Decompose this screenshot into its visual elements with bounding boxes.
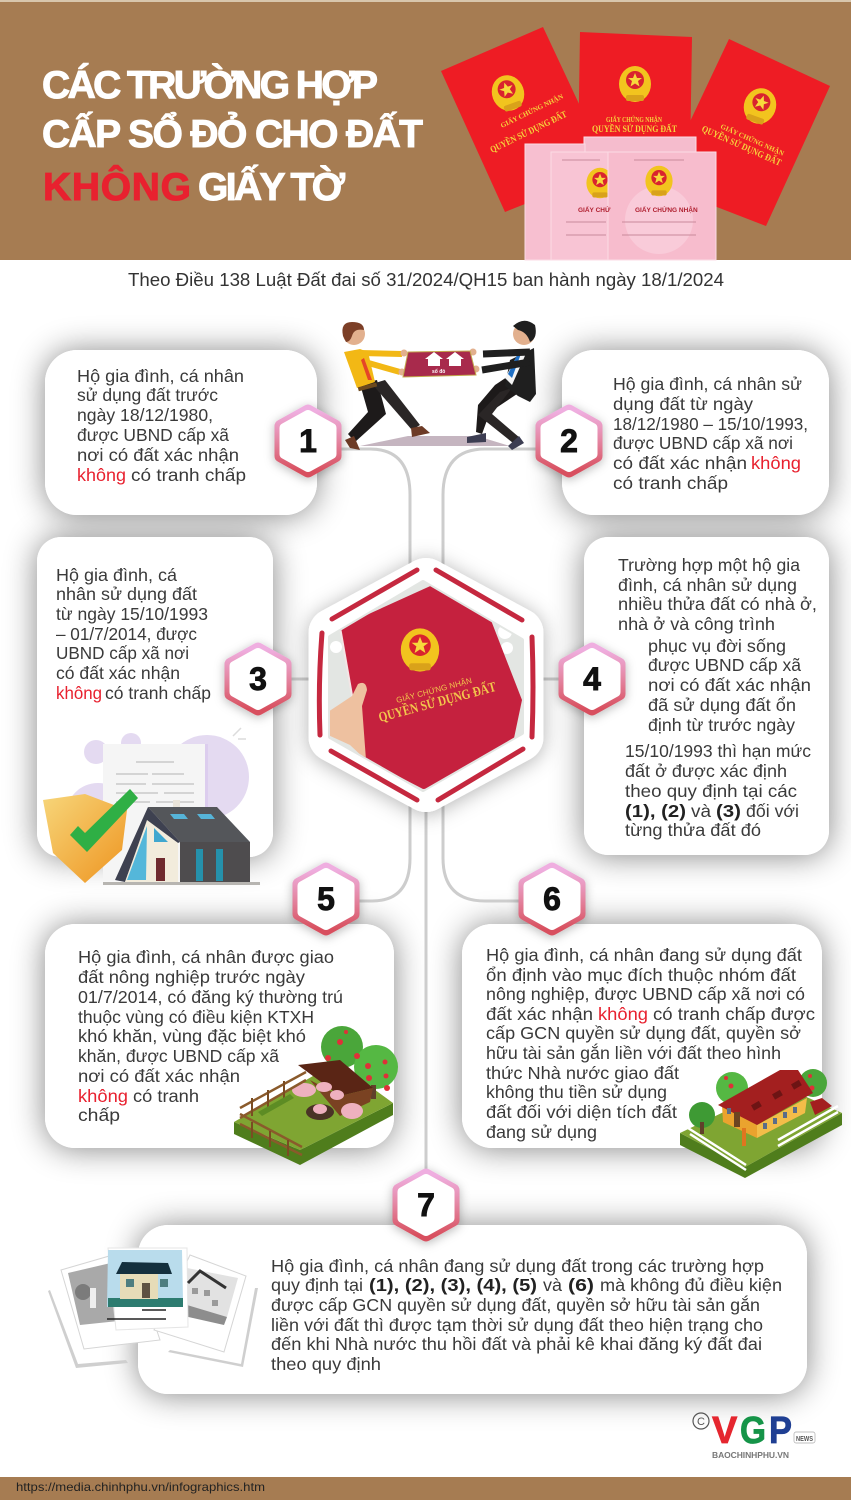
illustration: red land certificate books: QUYỀN SỬ DỤNG ĐẤT: [488, 107, 569, 156]
case 4 text: 15/10/1993 thì hạn mức: [625, 741, 811, 761]
title: KHÔNG: [43, 164, 191, 209]
case 4 text: đối với: [746, 801, 799, 821]
case 5 text: nơi có đất xác nhận: [78, 1066, 240, 1086]
illustration: farmhouse: [680, 1069, 842, 1178]
case 2 text: [613, 374, 808, 493]
logo: VGP: [693, 1410, 815, 1460]
illustration: red land certificate books: QUYỀN SỬ DỤNG ĐẤT: [592, 122, 678, 135]
badge 6: 6: [543, 881, 561, 917]
case 7 text: đến khi Nhà nước thu hồi đất và phải kê khai đăng ký đất đai: [271, 1334, 762, 1354]
illustration: two men pulling land certificate: sổ đỏ: [432, 368, 445, 375]
case 7 text: (1), (2), (3), (4), (5): [369, 1275, 537, 1295]
case 2 text: được UBND cấp xã nơi: [613, 433, 793, 453]
case 6 text: đất đối với diện tích đất: [486, 1102, 677, 1122]
case 1 text: nơi có đất xác nhận: [77, 445, 239, 465]
case 3 text: Hộ gia đình, cá: [56, 565, 177, 585]
title: GIẤY TỜ: [198, 165, 346, 209]
badge 1: [281, 411, 335, 471]
case 6 text: đang sử dụng: [486, 1122, 597, 1142]
case 5 text: khăn, được UBND cấp xã: [78, 1046, 279, 1066]
case 4 text: Trường hợp một hộ gia: [618, 555, 800, 575]
case 7 text: [271, 1256, 782, 1374]
case 1 text: Hộ gia đình, cá nhân: [77, 366, 244, 386]
central hexagon with certificate photo: QUYỀN SỬ DỤNG ĐẤT: [377, 678, 498, 726]
illustration: red land certificate books: QUYỀN SỬ DỤNG ĐẤT: [700, 122, 784, 169]
footer band: [0, 1477, 851, 1500]
case 4 text: (3): [716, 801, 741, 821]
illustration: red land certificate books: [441, 27, 830, 260]
case 6 text: thức Nhà nước giao đất: [486, 1063, 679, 1083]
case 6 text: có tranh chấp được: [653, 1004, 815, 1024]
case 4 text: đã sử dụng đất ổn: [648, 695, 796, 715]
case 4 text: đình, cá nhân sử dụng: [618, 575, 797, 595]
logo: VGP: BAOCHINHPHU.VN: [712, 1450, 789, 1460]
case 1 text: có tranh chấp: [131, 465, 246, 485]
case 3 text: nhân sử dụng đất: [56, 584, 197, 604]
case 6 text: không: [598, 1004, 648, 1024]
case 7 text: (6): [568, 1275, 594, 1295]
case 3 text: từ ngày 15/10/1993: [56, 604, 208, 624]
case 6 text: hữu tài sản gắn liền với đất theo hình: [486, 1042, 781, 1063]
case 5 text: đất nông nghiệp trước ngày: [78, 967, 305, 987]
case 5 text: có tranh: [133, 1086, 199, 1106]
badge 3: 3: [249, 661, 267, 697]
panel: case 7: [138, 1225, 807, 1394]
illustration: red land certificate books: GIẤY CHỨNG NHẬN: [635, 204, 698, 214]
case 2 text: dụng đất từ ngày: [613, 394, 753, 414]
illustration: red land certificate books: GIẤY CHỨ: [578, 204, 611, 214]
case 1 text: [77, 366, 246, 485]
case 2 text: có đất xác nhận: [613, 453, 747, 473]
case 4 text: và: [691, 801, 711, 821]
case 2 text: có tranh chấp: [613, 473, 728, 493]
case 6 text: nông nghiệp, được UBND cấp xã nơi có: [486, 984, 805, 1004]
badge 3: [231, 649, 285, 709]
case 4 text: theo quy định tại các: [625, 781, 797, 801]
title: [42, 63, 423, 209]
connector lines: [280, 449, 570, 1180]
logo: VGP: V: [712, 1410, 738, 1452]
case 6 text: đất xác nhận: [486, 1004, 593, 1024]
case 3 text: – 01/7/2014, được: [56, 624, 197, 644]
illustration: two men pulling land certificate: [342, 321, 536, 450]
case 3 text: UBND cấp xã nơi: [56, 643, 189, 663]
case 1 text: không: [77, 465, 126, 485]
badge 6: [525, 869, 579, 929]
logo: VGP: G: [740, 1410, 766, 1452]
case 7 text: quy định tại: [271, 1275, 363, 1295]
case 4 text: nơi có đất xác nhận: [648, 675, 811, 695]
case 2 text: Hộ gia đình, cá nhân sử: [613, 374, 802, 394]
badge 7: [399, 1175, 453, 1235]
subtitle: Theo Điều 138 Luật Đất đai số 31/2024/QH15 ban hành ngày 18/1/2024: [128, 270, 724, 290]
central hexagon with certificate photo: GIẤY CHỨNG NHẬN: [395, 675, 473, 705]
illustration: house photos: [48, 1248, 258, 1368]
central hexagon with certificate photo: [319, 570, 533, 800]
panel: case 1: [45, 350, 317, 515]
case 5 text: không: [78, 1086, 128, 1106]
badge 4: [565, 649, 619, 709]
case 1 text: sử dụng đất trước: [77, 385, 218, 405]
logo: VGP: NEWS: [796, 1436, 813, 1443]
illustration: red land certificate books: GIẤY CHỨNG NHẬN: [499, 92, 565, 130]
badge 5: [299, 869, 353, 929]
panel: case 2: [562, 350, 829, 515]
panel: case 5: [45, 924, 394, 1148]
case 7 text: mà không đủ điều kiện: [600, 1275, 782, 1295]
footer band: https://media.chinhphu.vn/infographics.htm: [16, 1480, 265, 1494]
badge 1: 1: [299, 423, 317, 459]
case 4 text: (1), (2): [625, 801, 686, 821]
case 4 text: [618, 555, 817, 840]
case 2 text: không: [751, 453, 801, 473]
logo: VGP: C: [697, 1416, 705, 1428]
panel: case 3: [37, 537, 273, 857]
case 7 text: liền với đất thì được tạm thời sử dụng đất theo hiện trạng cho: [271, 1315, 763, 1335]
case 6 text: không thu tiền sử dụng: [486, 1082, 667, 1102]
panel: case 4: [584, 537, 829, 855]
illustration: red land certificate books: GIẤY CHỨNG NHẬN: [606, 116, 662, 124]
case 4 text: từng thửa đất đó: [625, 820, 761, 840]
badge 2: [542, 411, 596, 471]
illustration: red land certificate books: GIẤY CHỨNG NHẬN: [719, 123, 785, 158]
logo: VGP: P: [769, 1410, 792, 1452]
case 1 text: được UBND cấp xã: [77, 425, 229, 445]
case 3 text: có tranh chấp: [105, 683, 211, 703]
case 3 text: [56, 565, 211, 703]
case 7 text: được cấp GCN quyền sử dụng đất, quyền sở hữu tài sản gắn: [271, 1294, 760, 1315]
title: CẤP SỔ ĐỎ CHO ĐẤT: [42, 111, 423, 156]
badge 5: 5: [317, 881, 335, 917]
badge 4: 4: [583, 661, 601, 697]
case 7 text: Hộ gia đình, cá nhân đang sử dụng đất trong các trường hợp: [271, 1256, 764, 1276]
case 5 text: [78, 947, 343, 1125]
case 5 text: chấp: [78, 1105, 120, 1125]
case 1 text: ngày 18/12/1980,: [77, 405, 213, 425]
badge 2: 2: [560, 423, 578, 459]
case 4 text: được UBND cấp xã: [648, 655, 801, 675]
case 3 text: không: [56, 683, 102, 703]
case 3 text: có đất xác nhận: [56, 663, 180, 683]
case 6 text: cấp GCN quyền sử dụng đất, quyền sở: [486, 1023, 801, 1043]
panel: case 6: [462, 924, 822, 1148]
certificate photo: [328, 583, 522, 789]
case 7 text: và: [543, 1275, 562, 1295]
header band: [0, 0, 851, 260]
case 4 text: nhiều thửa đất có nhà ở,: [618, 594, 817, 614]
case 4 text: đất ở được xác định: [625, 761, 787, 781]
case 4 text: phục vụ đời sống: [648, 636, 786, 656]
badge 7: 7: [417, 1187, 435, 1223]
case 5 text: thuộc vùng có điều kiện KTXH: [78, 1007, 314, 1027]
case 7 text: theo quy định: [271, 1354, 381, 1374]
case 5 text: Hộ gia đình, cá nhân được giao: [78, 947, 334, 967]
title: CÁC TRƯỜNG HỢP: [42, 63, 378, 107]
case 4 text: định từ trước ngày: [648, 715, 795, 735]
illustration: document, shield and house: [43, 728, 260, 885]
case 6 text: [486, 945, 815, 1142]
case 5 text: khó khăn, vùng đặc biệt khó: [78, 1026, 306, 1046]
illustration: pig farm: [234, 1026, 398, 1165]
case 6 text: Hộ gia đình, cá nhân đang sử dụng đất: [486, 945, 802, 965]
case 6 text: ổn định vào mục đích thuộc nhóm đất: [486, 965, 796, 985]
case 2 text: 18/12/1980 – 15/10/1993,: [613, 414, 808, 434]
case 5 text: 01/7/2014, có đăng ký thường trú: [78, 987, 343, 1007]
case 4 text: nhà ở và công trình: [618, 614, 775, 634]
